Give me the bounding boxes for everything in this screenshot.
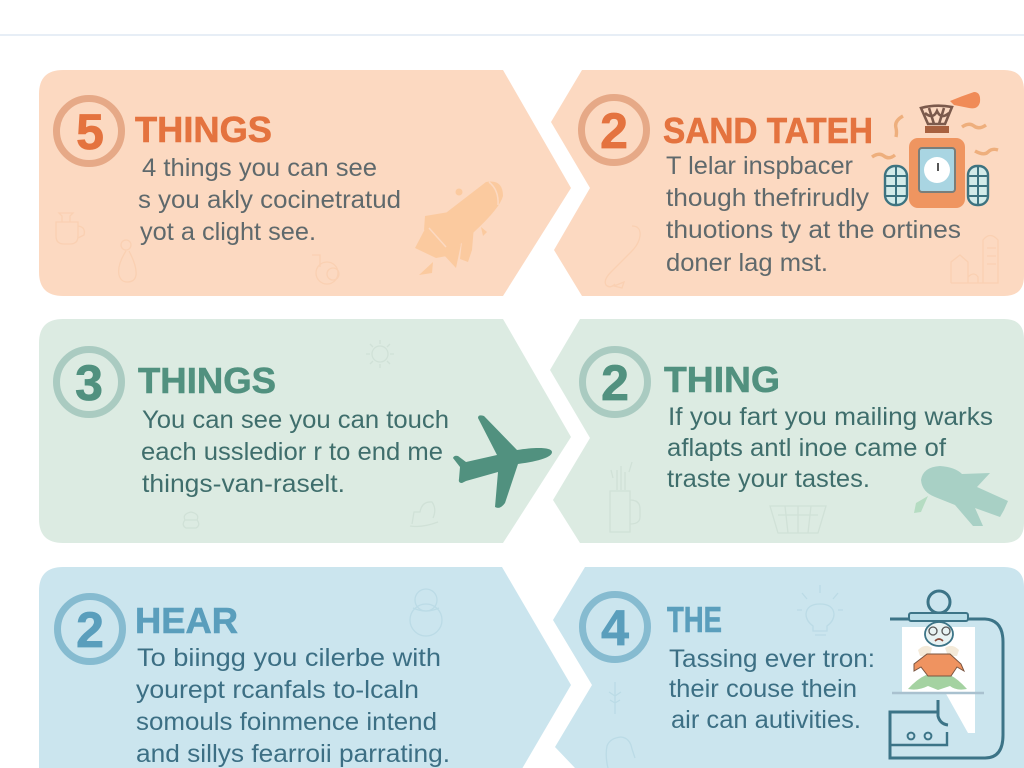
heading: the: THE (667, 599, 722, 640)
body text: aflapts antl inoe came of (667, 434, 946, 462)
icon: faint buildings (951, 236, 998, 283)
body text: T lelar inspbacer (666, 152, 853, 180)
icon: faint mug (56, 213, 84, 244)
body text: somouls foinmence intend (136, 708, 437, 736)
body text: If you fart you mailing warks (668, 403, 993, 431)
heading: thing: THING (664, 359, 780, 400)
badge: number 3 (56, 350, 122, 414)
icon: faint hook (605, 226, 640, 288)
body text: each ussledior r to end me (141, 438, 443, 466)
icon: faint plant (609, 682, 621, 714)
body text (666, 152, 961, 277)
body text (667, 403, 993, 493)
icon: faint cake (183, 512, 199, 528)
body text: things-van-raselt. (142, 470, 345, 498)
panel: sand tateh (551, 70, 1024, 296)
badge: number 4 (582, 594, 648, 660)
badge: number 2: 2 (601, 355, 629, 411)
panel: the (553, 567, 1024, 768)
heading: hear: HEAR (135, 600, 238, 641)
icon: faint shell (410, 502, 438, 526)
badge: number 2: 2 (76, 602, 104, 658)
body text: s you akly cocinetratud (138, 186, 401, 214)
icon: perfume bottle with clock (872, 92, 998, 208)
badge: number 5 (56, 98, 122, 164)
heading: things: THINGS (138, 360, 276, 401)
badge: number 5: 5 (76, 104, 104, 160)
icon: faint blob (606, 737, 635, 768)
icon: airplane (453, 415, 552, 508)
icon: clipboard with person (890, 591, 1003, 758)
panel: 3 things (39, 319, 571, 543)
body text: 4 things you can see (142, 154, 377, 182)
badge: number 2: 2 (600, 103, 628, 159)
badge: number 2 (582, 350, 648, 414)
icon: rocket (415, 182, 503, 275)
icon: faint sun (366, 340, 394, 368)
body text: To biingg you cilerbe with (137, 644, 441, 672)
icon: faint snowman (410, 589, 442, 636)
icon: faint basket (770, 506, 826, 533)
badge: number 2 (58, 596, 122, 662)
panel: hear (39, 567, 571, 768)
panel: 5 things (39, 70, 571, 296)
body text: yot a clight see. (140, 218, 316, 246)
body text (669, 645, 875, 734)
body text (141, 406, 449, 498)
badge: number 4: 4 (601, 600, 629, 656)
icon: pale airplane (914, 466, 1008, 526)
body text (138, 154, 401, 246)
body text: and sillys fearroii parrating. (136, 740, 450, 768)
body text: air can autivities. (671, 706, 861, 734)
icon: faint figure (119, 240, 136, 282)
body text: Tassing ever tron: (669, 645, 875, 673)
body text (136, 644, 450, 768)
body text: doner lag mst. (666, 249, 828, 277)
body text: yourept rcanfals to-lcaln (136, 676, 419, 704)
body text: traste your tastes. (667, 465, 870, 493)
icon: faint mug with sticks (610, 462, 640, 532)
badge: number 2 (582, 98, 646, 162)
badge: number 3: 3 (75, 355, 103, 411)
body text: thuotions ty at the ortines (666, 216, 961, 244)
body text: You can see you can touch (142, 406, 449, 434)
body text: though thefrirudly (666, 184, 870, 212)
heading: sand tateh: SAND TATEH (663, 110, 873, 151)
body text: their couse thein (669, 675, 857, 703)
heading: things: THINGS (135, 109, 272, 150)
icon: faint rocket detail (312, 255, 339, 284)
panel: 2 thing (550, 319, 1024, 543)
icon: faint light bulb (797, 585, 843, 635)
